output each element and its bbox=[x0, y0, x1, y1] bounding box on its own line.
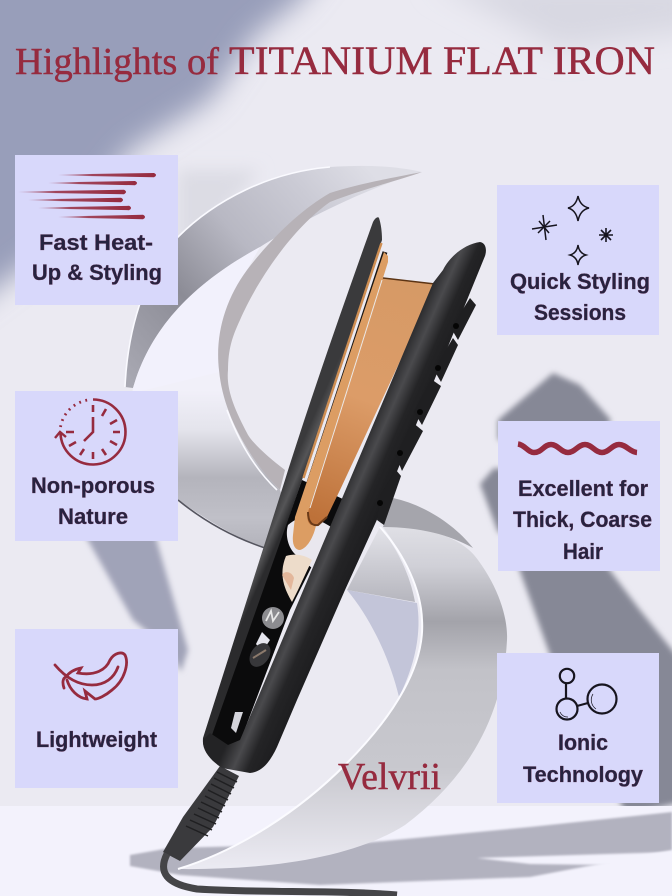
dark gap behind plates bbox=[300, 252, 385, 510]
front arm bbox=[203, 242, 486, 773]
control dial bbox=[262, 607, 284, 629]
text: non-porous: Non-porous bbox=[31, 473, 155, 498]
control button bbox=[245, 639, 275, 671]
text: quick styling bbox=[510, 269, 650, 325]
floor bbox=[0, 806, 672, 896]
text: fast heat-up bbox=[32, 230, 162, 285]
front plate bbox=[307, 278, 436, 525]
brand name: Velvrii bbox=[338, 756, 441, 798]
panel: lightweight bbox=[15, 629, 178, 788]
loop interior upper bbox=[347, 527, 415, 602]
loop interior shadow bbox=[347, 590, 419, 697]
text: thick coarse hair: Thick, Coarse bbox=[513, 507, 652, 532]
panel: fast heat-up bbox=[15, 155, 178, 305]
shadow: right wall peak bbox=[498, 373, 611, 440]
lower-left body bbox=[125, 372, 300, 548]
icon: sparkles bbox=[532, 196, 613, 265]
buttons on the side of the arm bbox=[377, 298, 476, 525]
text: thick coarse hair: Excellent for bbox=[518, 476, 648, 501]
text: ionic technology bbox=[523, 730, 644, 787]
white plate frame bbox=[287, 517, 336, 568]
title: TITANIUM FLAT IRON bbox=[229, 38, 655, 83]
text: non-porous bbox=[31, 473, 155, 529]
text: fast heat-up: Fast Heat- bbox=[39, 230, 153, 255]
floor shadow bbox=[130, 812, 672, 885]
text: ionic technology: Technology bbox=[523, 762, 644, 787]
lower loop band bbox=[178, 527, 507, 869]
thin inner band bbox=[218, 172, 422, 490]
back plate bbox=[293, 252, 388, 550]
panel: non-porous bbox=[15, 391, 178, 541]
icon: wave bbox=[518, 444, 637, 452]
shadow: left wall bbox=[85, 535, 188, 672]
text: ionic technology: Ionic bbox=[558, 730, 608, 755]
text: fast heat-up: Up & Styling bbox=[32, 260, 162, 285]
panel: quick styling bbox=[497, 185, 659, 335]
title bbox=[15, 38, 655, 83]
cream heel bbox=[282, 555, 312, 602]
ribbon sculpture bbox=[125, 166, 507, 869]
thin copper edge bbox=[304, 243, 382, 478]
text: non-porous: Nature bbox=[58, 504, 128, 529]
text: quick styling: Quick Styling bbox=[510, 269, 650, 294]
crossing band bbox=[383, 498, 473, 548]
white sliver bbox=[256, 632, 270, 652]
text: thick coarse hair: Hair bbox=[563, 539, 603, 564]
text: lightweight: Lightweight bbox=[36, 727, 158, 752]
back arm bbox=[203, 217, 382, 765]
black slot bbox=[212, 480, 345, 746]
shadow: right wall lower bbox=[516, 560, 672, 812]
slot sliver bbox=[231, 712, 243, 733]
inner white area bbox=[125, 247, 300, 548]
inner white edge of loop bbox=[178, 527, 422, 869]
title: Highlights of bbox=[15, 41, 219, 83]
text: quick styling: Sessions bbox=[534, 300, 626, 325]
power cord bbox=[164, 854, 397, 895]
icon: feather bbox=[55, 653, 126, 699]
panel: thick coarse hair bbox=[498, 421, 660, 571]
icon: speed lines bbox=[18, 173, 156, 219]
panel: ionic technology bbox=[497, 653, 659, 803]
icon: clock bbox=[55, 400, 125, 464]
icon: molecule bbox=[556, 669, 616, 720]
upper swoosh band bbox=[125, 166, 422, 388]
shadow: right wall lobe bbox=[480, 468, 510, 535]
strain relief bbox=[163, 766, 239, 861]
flat iron bbox=[163, 217, 486, 895]
text: thick coarse hair bbox=[513, 476, 652, 564]
